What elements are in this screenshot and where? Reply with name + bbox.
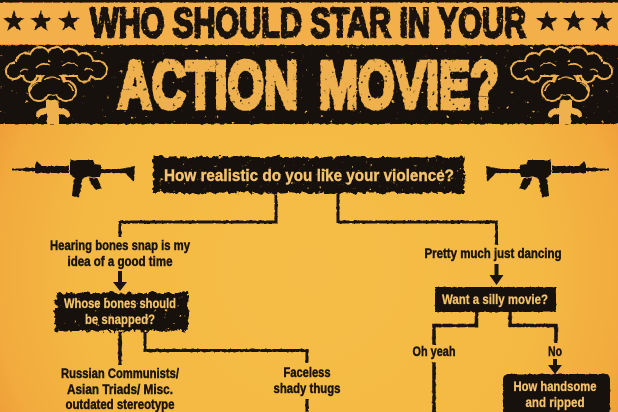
title word: action: ACTION <box>118 48 298 123</box>
box label: Want a silly movie? <box>442 292 548 307</box>
answer: faceless thugs: shady thugs <box>274 381 340 396</box>
answer: no: No <box>548 344 562 359</box>
rifle right <box>486 160 609 197</box>
stars left <box>3 10 80 31</box>
answer: stereotype: outdated stereotype <box>66 397 175 412</box>
box shape <box>153 157 464 193</box>
header band: who should star <box>0 0 618 46</box>
question box: realism <box>153 157 464 193</box>
box label: be snapped? <box>85 312 155 327</box>
mushroom cloud right <box>510 46 613 124</box>
box shape <box>55 293 188 331</box>
answer: bones snap: idea of a good time <box>68 254 173 269</box>
question box: how handsome <box>503 374 610 412</box>
title band <box>0 3 618 44</box>
answer: stereotype: Asian Triads/ Misc. <box>67 382 173 397</box>
title word: movie: MOVIE? <box>319 48 499 123</box>
answer: stereotype: Russian Communists/ <box>61 366 179 381</box>
arrow: to whose bones <box>113 271 127 291</box>
box label: How handsome <box>514 379 597 394</box>
box label: How realistic do you like your violence? <box>164 167 454 185</box>
flow connectors <box>120 194 556 412</box>
box shape <box>503 374 610 412</box>
arrow: to silly movie <box>490 264 504 285</box>
question box: whose bones <box>55 293 188 331</box>
answer: faceless thugs: Faceless <box>284 365 330 380</box>
answer: bones snap: Hearing bones snap is my <box>50 238 190 253</box>
mushroom cloud left <box>5 46 108 124</box>
black banner <box>0 45 618 124</box>
answer: dancing: Pretty much just dancing <box>424 246 562 261</box>
arrow: to how handsome <box>548 359 562 374</box>
answer: oh yeah: Oh yeah <box>412 344 456 359</box>
rifle left <box>12 160 135 197</box>
box shape <box>435 287 556 312</box>
box label: and ripped <box>526 395 584 410</box>
question box: silly movie <box>435 287 556 312</box>
top edge <box>0 0 618 2</box>
box label: Whose bones should <box>64 296 176 311</box>
banner fill <box>0 45 618 124</box>
stars right <box>536 10 613 31</box>
